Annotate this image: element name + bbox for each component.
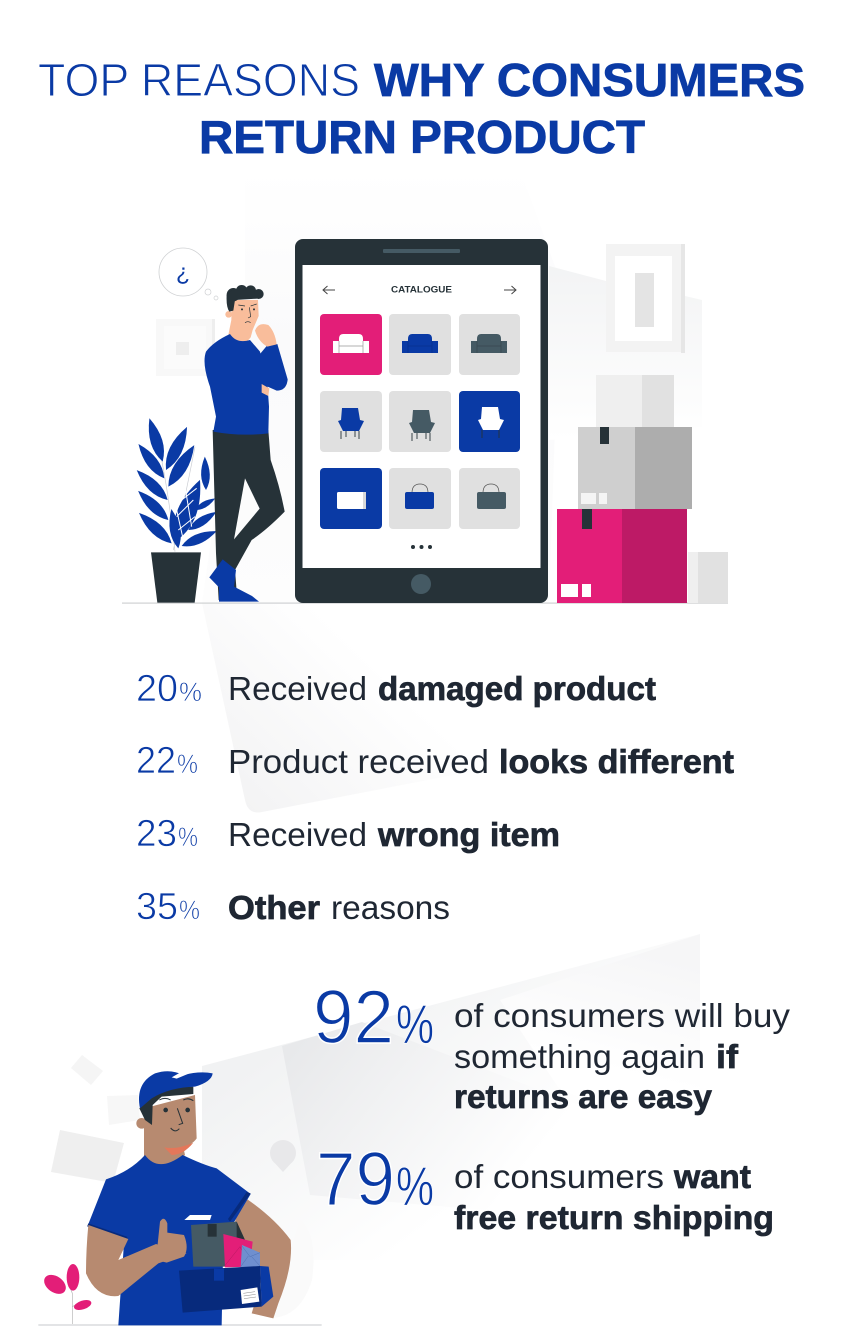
stat: 79 percent: %: [396, 1155, 434, 1217]
reason: wrong item 23%: [136, 813, 560, 855]
reason: damaged product 20%: Received: [228, 670, 367, 707]
neck and head: [228, 300, 259, 345]
left arm: [86, 1225, 187, 1296]
wall frame left: [156, 319, 215, 376]
curly hair: [227, 285, 264, 312]
blue envelope: [241, 1245, 260, 1267]
stat: 92 percent: 92: [313, 975, 394, 1060]
envelopes background: [51, 1055, 314, 1318]
right arm: [233, 1197, 291, 1318]
icon: dark sofa: [471, 334, 507, 353]
pagination dots: [411, 545, 432, 549]
small grey box: [688, 552, 728, 603]
grey box in hands: [191, 1222, 245, 1267]
pink box: [557, 509, 687, 603]
reason: wrong item 23%: Received: [228, 816, 367, 853]
sweater: [205, 334, 269, 435]
thought bubble: ¿: [176, 259, 190, 285]
icon: blue sofa: [402, 334, 438, 353]
sleeve cuffs: [87, 1192, 251, 1239]
pink envelope: [223, 1234, 253, 1267]
reason: other reasons 35%: Other: [228, 889, 320, 926]
reason: looks different 22%: [136, 740, 734, 782]
shoes: [209, 559, 259, 602]
shirt: [87, 1155, 251, 1325]
gap between legs: [234, 478, 260, 539]
hair: [139, 1087, 193, 1125]
stat: 92 percent: something again: [454, 1038, 705, 1075]
stat: 92 percent: if: [716, 1038, 739, 1075]
reasons list: [136, 668, 734, 928]
neck: [144, 1127, 185, 1173]
thought bubble: [159, 248, 218, 300]
background shapes: [202, 170, 702, 1260]
cap: [139, 1071, 213, 1108]
stat: 79 percent: 79: [316, 1137, 395, 1222]
floor line: [122, 602, 728, 604]
stat: 79 percent: free return shipping: [454, 1199, 774, 1236]
floor line: [38, 1324, 322, 1326]
right arrow: [504, 286, 516, 294]
reason: other reasons 35%: %: [179, 895, 200, 925]
grey box: [578, 427, 692, 509]
icon: blue armchair: [338, 408, 364, 439]
illustration: shopper and catalogue tablet: [122, 239, 728, 604]
icon: white sofa: [333, 334, 369, 353]
title: TOP REASONS: [38, 54, 360, 106]
title: [38, 54, 805, 163]
reason: looks different 22%: looks different: [499, 743, 734, 780]
left arrow: [323, 286, 335, 294]
thumbs-up hand: [156, 1219, 187, 1263]
icon: dark bag: [477, 484, 506, 509]
pot: [151, 552, 201, 603]
reason: damaged product 20%: 20: [136, 668, 178, 710]
icon: blue bag: [405, 484, 434, 509]
badge: [184, 1215, 212, 1220]
icon: dark armchair: [409, 410, 435, 441]
catalogue header: CATALOGUE: [391, 284, 452, 296]
light top box: [596, 375, 674, 427]
face details: [163, 1108, 168, 1112]
reason: looks different 22%: Product received: [228, 743, 489, 780]
stat: 92 percent: of consumers will buy: [454, 997, 791, 1034]
stat: 79 percent: want: [673, 1158, 751, 1195]
stat: 92 percent: returns are easy: [454, 1078, 713, 1115]
stat: 79 percent: [316, 1137, 774, 1236]
head: [144, 1095, 197, 1153]
reason: damaged product 20%: %: [179, 677, 202, 707]
stat: 92 percent: [313, 975, 791, 1115]
reason: damaged product 20%: [136, 668, 656, 710]
reason: other reasons 35%: reasons: [331, 889, 450, 926]
hand on chin: [255, 324, 277, 347]
plant: [133, 417, 219, 603]
illustration: delivery man: [38, 1071, 322, 1326]
reason: wrong item 23%: wrong item: [377, 816, 560, 853]
reason: other reasons 35%: [136, 886, 450, 928]
reason: wrong item 23%: 23: [136, 813, 177, 855]
reason: looks different 22%: %: [177, 749, 198, 779]
title: RETURN PRODUCT: [199, 111, 645, 163]
face details: [241, 308, 243, 310]
icon: white box: [337, 492, 366, 509]
shopper figure: [205, 285, 288, 602]
wall frame right: [606, 244, 685, 353]
title: WHY CONSUMERS: [374, 54, 805, 106]
trousers: [213, 430, 285, 600]
reason: other reasons 35%: 35: [136, 886, 178, 928]
arm: [255, 344, 288, 391]
icon: white armchair: [478, 407, 504, 438]
reason: damaged product 20%: damaged product: [378, 670, 656, 707]
stat: 92 percent: %: [396, 993, 434, 1055]
pink plant: [41, 1264, 93, 1324]
stat: 79 percent: of consumers: [454, 1158, 664, 1195]
product tiles: [320, 314, 520, 529]
stacked boxes: [557, 375, 728, 603]
blue box in hands: [179, 1266, 273, 1313]
reason: looks different 22%: 22: [136, 740, 176, 782]
reason: wrong item 23%: %: [178, 822, 198, 852]
tablet: [295, 239, 548, 603]
